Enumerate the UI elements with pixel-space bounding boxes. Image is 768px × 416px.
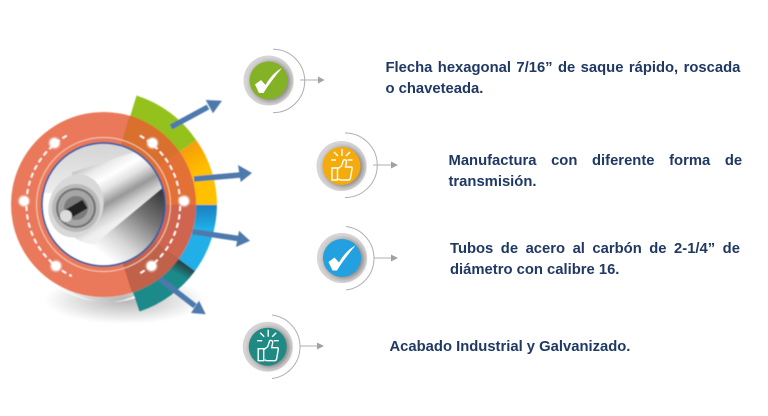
badge bbox=[244, 56, 294, 106]
text 2 bbox=[448, 153, 742, 190]
roller tube bbox=[72, 152, 163, 244]
connector bbox=[374, 257, 391, 259]
badge bbox=[316, 141, 366, 191]
dashed arc: left bbox=[26, 136, 72, 276]
overlap tints bbox=[104, 116, 180, 204]
text 3: Tubos de acero al carbón de 2-1/4” de bbox=[450, 241, 740, 257]
arrow: green bbox=[171, 100, 222, 127]
arc bbox=[272, 315, 300, 378]
text 1 bbox=[386, 60, 741, 97]
arc bbox=[346, 226, 374, 290]
ring nodes bbox=[19, 138, 189, 271]
icon: thumb up bbox=[257, 330, 279, 361]
text 1: o chaveteada. bbox=[386, 81, 483, 97]
text 3: diámetro con calibre 16. bbox=[450, 262, 619, 278]
arc bbox=[345, 133, 377, 198]
roller diagram bbox=[11, 96, 252, 324]
text 4: Acabado Industrial y Galvanizado. bbox=[390, 339, 630, 355]
item 2: thumb bbox=[316, 133, 398, 198]
text 3 bbox=[450, 241, 740, 278]
roller end cap bbox=[48, 176, 104, 238]
text 2: transmisión. bbox=[448, 174, 536, 190]
icon: thumb up bbox=[331, 149, 352, 180]
connector bbox=[373, 164, 391, 166]
sector: blue bbox=[104, 204, 217, 271]
thin ring bbox=[36, 138, 170, 272]
sector: teal bbox=[104, 204, 195, 312]
blue rim bbox=[42, 143, 165, 266]
arrow: teal bbox=[160, 279, 206, 314]
item 1: check bbox=[244, 49, 324, 113]
item 3: check bbox=[317, 226, 398, 290]
item 4: thumb bbox=[243, 315, 324, 378]
icon: check bbox=[328, 246, 356, 270]
arrow: orange bbox=[194, 165, 252, 182]
hex shaft bbox=[68, 204, 85, 214]
badge bbox=[243, 322, 293, 372]
bearing bbox=[56, 188, 96, 228]
roller photo bbox=[42, 143, 165, 266]
coral disc bbox=[11, 112, 196, 297]
arc bbox=[273, 49, 305, 113]
icon: check bbox=[255, 68, 282, 93]
arrow: blue bbox=[193, 231, 250, 247]
sector: green bbox=[104, 96, 196, 204]
disc shadow bbox=[45, 276, 205, 324]
connector bbox=[300, 345, 317, 347]
dashed arc: right bbox=[140, 136, 180, 273]
badge bbox=[317, 233, 367, 283]
connector bbox=[300, 79, 318, 81]
sector: orange bbox=[104, 140, 217, 205]
infographic canvas bbox=[10, 48, 742, 379]
text 2: Manufactura con diferente forma de bbox=[448, 153, 742, 169]
text 1: Flecha hexagonal 7/16” de saque rápido, roscada bbox=[386, 60, 741, 76]
